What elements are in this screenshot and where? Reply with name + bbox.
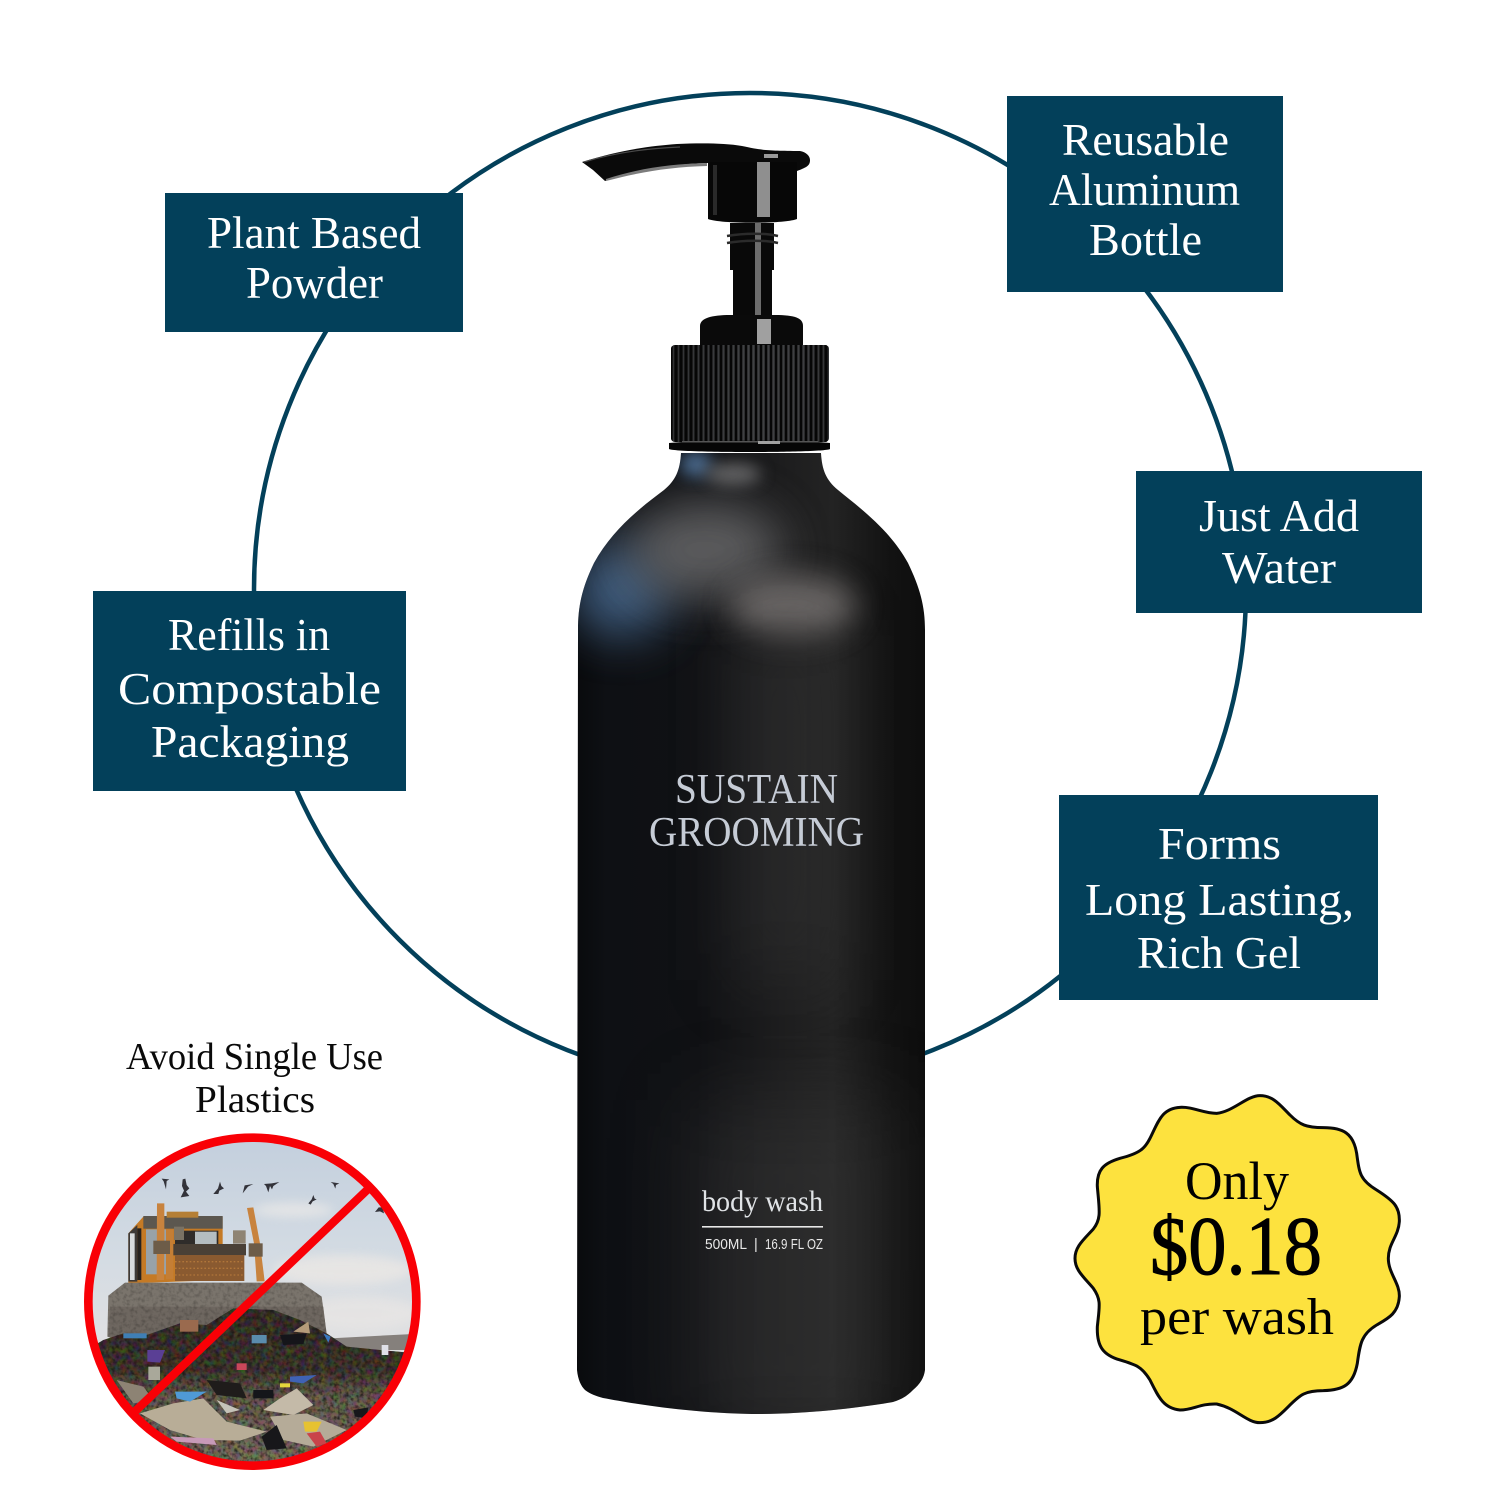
- brand name: GROOMING: [649, 810, 864, 856]
- volume label: 16.9 FL OZ: [765, 1237, 823, 1253]
- callout: forms long lasting rich gel: [1059, 795, 1378, 1000]
- bulldozer cab: [128, 1217, 223, 1283]
- pump collar: [700, 315, 803, 345]
- badge text: [1140, 1151, 1334, 1346]
- blade: [107, 1283, 327, 1340]
- product bottle: [570, 143, 935, 1440]
- callout: reusable aluminum bottle: Aluminum: [1049, 164, 1240, 215]
- callout: forms long lasting rich gel: Forms: [1158, 818, 1281, 869]
- connecting circle ring: [254, 93, 1246, 1085]
- badge: only $0.18 per wash: [1075, 1096, 1399, 1423]
- scalloped yellow seal: [1075, 1096, 1399, 1423]
- callout: just add water: Just Add: [1199, 490, 1359, 541]
- pump head: [708, 162, 797, 223]
- volume label: [705, 1237, 823, 1253]
- heading: avoid single use plastics: Avoid Single Use: [126, 1036, 383, 1078]
- cap ring: [669, 441, 830, 452]
- heading: avoid single use plastics: Plastics: [195, 1079, 315, 1121]
- volume label: |: [754, 1237, 758, 1253]
- brand name: SUSTAIN: [675, 767, 838, 813]
- callout: reusable aluminum bottle: Bottle: [1089, 214, 1202, 265]
- callout: forms long lasting rich gel: Long Lasting,: [1085, 874, 1354, 925]
- landfill scene: [87, 1137, 420, 1473]
- icon: prohibited landfill bulldozer: [87, 1137, 420, 1473]
- product name: body wash: [702, 1185, 823, 1218]
- volume label: 500ML: [705, 1237, 747, 1253]
- engine grille: [173, 1244, 246, 1255]
- ribbed cap: [671, 345, 829, 442]
- callout: plant based powder: Plant Based: [207, 207, 421, 258]
- callout: plant based powder: Powder: [246, 257, 383, 308]
- callout: forms long lasting rich gel: Rich Gel: [1137, 927, 1301, 978]
- pump stem: [730, 223, 774, 316]
- heading: avoid single use plastics: [126, 1036, 383, 1121]
- pump actuator: [582, 143, 810, 181]
- badge text: per wash: [1140, 1289, 1334, 1346]
- callout: refills in compostable packaging: [93, 591, 406, 791]
- prohibition slash: [134, 1186, 372, 1412]
- bottle body: [570, 445, 935, 1440]
- callout: refills in compostable packaging: Compostable: [118, 663, 381, 714]
- callout: plant based powder: [165, 193, 463, 332]
- callout: just add water: Water: [1222, 542, 1336, 593]
- lift arms: [157, 1203, 164, 1280]
- badge text: Only: [1185, 1151, 1289, 1211]
- birds: [162, 1179, 384, 1213]
- callout: refills in compostable packaging: Packaging: [151, 716, 349, 767]
- callout: reusable aluminum bottle: Reusable: [1062, 114, 1229, 165]
- callout: just add water: [1136, 471, 1422, 613]
- badge text: $0.18: [1150, 1200, 1322, 1293]
- distant treeline: [330, 1334, 413, 1350]
- brand name: [649, 767, 864, 856]
- callout: refills in compostable packaging: Refills in: [168, 609, 330, 660]
- prohibition ring: [88, 1138, 416, 1466]
- trash flecks: [123, 1320, 388, 1450]
- trash pile: [98, 1308, 404, 1462]
- callout: reusable aluminum bottle: [1007, 96, 1283, 292]
